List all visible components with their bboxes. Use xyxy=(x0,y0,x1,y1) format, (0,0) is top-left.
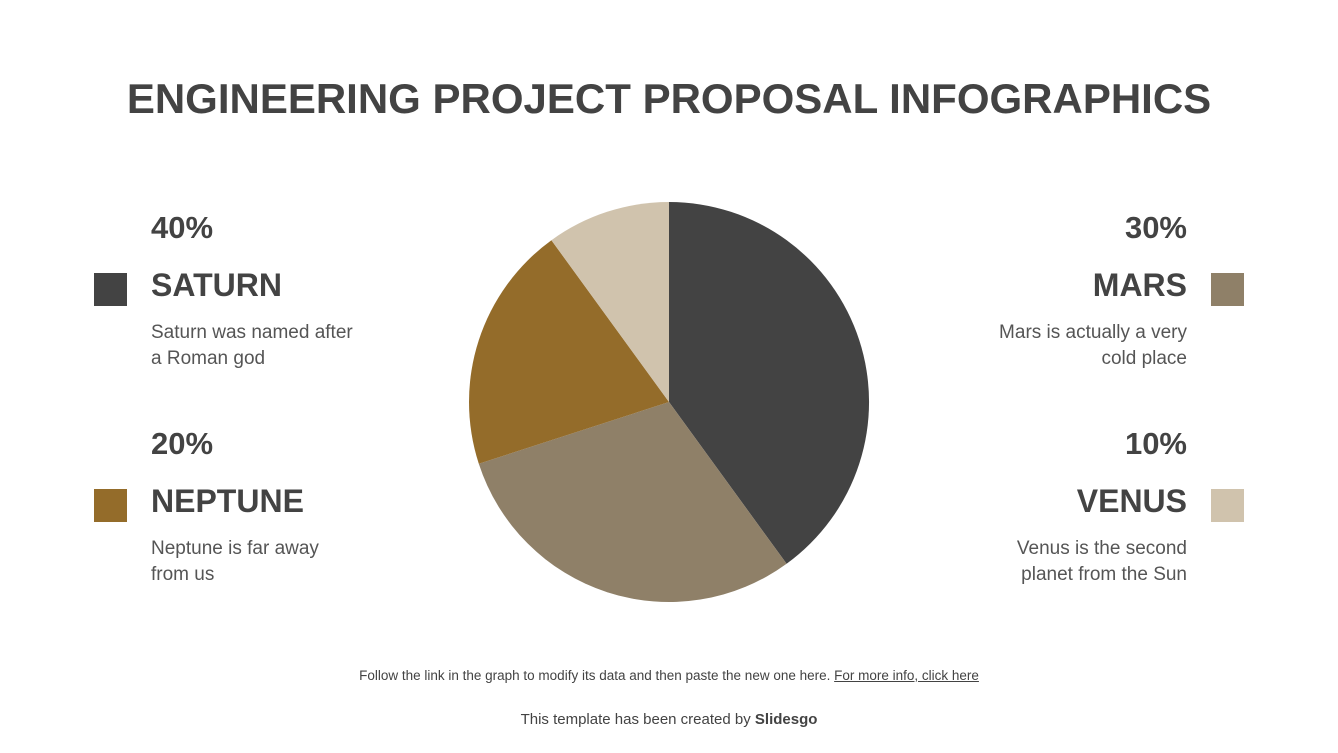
neptune square xyxy=(94,489,127,522)
saturn description: Saturn was named after a Roman god xyxy=(151,322,353,369)
panel: saturn xyxy=(94,210,353,369)
venus description: Venus is the second planet from the Sun xyxy=(1017,538,1187,585)
neptune name: NEPTUNE xyxy=(151,483,304,519)
mars percent: 30% xyxy=(1125,210,1187,245)
footnote: Follow the link in the graph to modify its data and then paste the new one here. For more info, click here xyxy=(359,668,979,683)
title: ENGINEERING PROJECT PROPOSAL INFOGRAPHICS xyxy=(127,75,1211,122)
saturn name: SATURN xyxy=(151,267,282,303)
saturn percent: 40% xyxy=(151,210,213,245)
saturn square xyxy=(94,273,127,306)
mars name: MARS xyxy=(1093,267,1187,303)
panel: venus xyxy=(1017,426,1244,585)
panel: mars xyxy=(999,210,1244,369)
credit: This template has been created by Slidesgo xyxy=(521,711,817,728)
mars description: Mars is actually a very cold place xyxy=(999,322,1187,369)
neptune percent: 20% xyxy=(151,426,213,461)
panel: neptune xyxy=(94,426,319,585)
mars square xyxy=(1211,273,1244,306)
venus percent: 10% xyxy=(1125,426,1187,461)
neptune description: Neptune is far away from us xyxy=(151,538,319,585)
venus square xyxy=(1211,489,1244,522)
venus name: VENUS xyxy=(1077,483,1187,519)
